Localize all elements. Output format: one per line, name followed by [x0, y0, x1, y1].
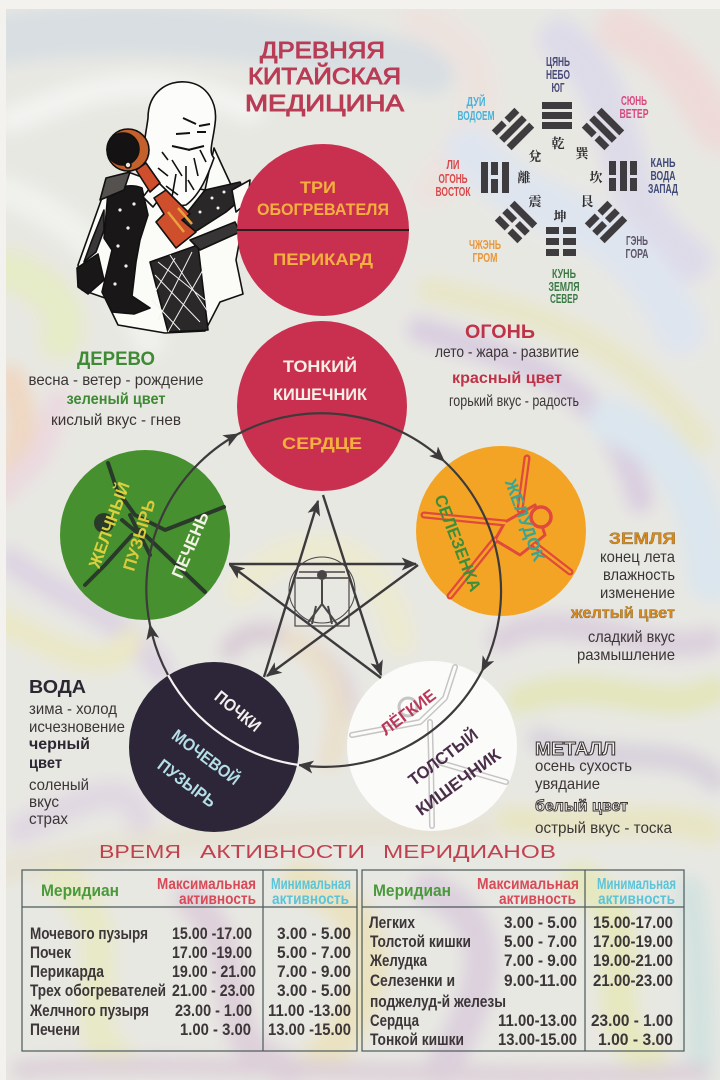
trigram: dui, lake [492, 108, 534, 150]
table header [373, 876, 676, 908]
title [245, 37, 405, 116]
robe dark panel [102, 186, 150, 314]
trigram: qian, heaven, south [542, 102, 572, 129]
trigram labels: ЗЕМЛЯ [548, 280, 580, 294]
illustration: old sage with key [77, 82, 250, 333]
table rows: 7.00 - 9.00 [277, 962, 351, 981]
text block: metal [535, 739, 672, 837]
text block: wood: зеленый цвет [66, 391, 166, 408]
title: МЕДИЦИНА [245, 90, 405, 116]
sleeve right dark band [176, 182, 246, 240]
table rows: 3.00 - 5.00 [504, 913, 577, 932]
text block: earth: сладкий вкус [588, 629, 675, 646]
hand [232, 180, 250, 212]
table rows: Желудка [369, 951, 427, 970]
circle: metal, lungs and large intestine [347, 661, 517, 831]
head [144, 82, 216, 206]
table rows: Печени [30, 1020, 80, 1039]
table rows: Трех обогревателей [30, 981, 166, 1000]
text block: water: ВОДА [29, 677, 86, 697]
text block: earth: размышление [577, 647, 675, 664]
table rows: 5.00 - 7.00 [277, 943, 351, 962]
trigram labels: ВОДА [650, 169, 676, 183]
text block: earth: влажность [603, 567, 675, 584]
heading: meridian activity times [99, 842, 556, 862]
table header: активность [179, 891, 256, 908]
trigram labels: ЛИ [446, 158, 460, 172]
table rows: 21.00-23.00 [593, 971, 673, 990]
text block: fire: горький вкус - радость [449, 393, 579, 410]
chinese trigram names: 坤 [553, 206, 567, 225]
table rows: Мочевого пузыря [30, 924, 148, 943]
table rows: Селезенки и [370, 971, 455, 990]
table rows: Почек [30, 943, 71, 962]
text block: wood: ДЕРЕВО [77, 349, 155, 370]
circle: water, kidneys and bladder: ПУЗЫРЬ [154, 755, 220, 811]
table header: Минимальная [271, 876, 351, 893]
trigram: li, fire, east [481, 162, 509, 193]
key staff [136, 163, 160, 192]
circle: triple burner and pericardium: ОБОГРЕВАТЕЛЯ [257, 200, 389, 219]
table rows: Толстой кишки [370, 932, 471, 951]
table rows: 3.00 - 5.00 [277, 981, 351, 1000]
circle: water, kidneys and bladder: ПОЧКИ [211, 687, 265, 736]
trigram labels: ЧЖЭНЬ [469, 238, 501, 252]
heading: meridian activity times: МЕРИДИАНОВ [383, 842, 556, 862]
icon: vitruvian man [289, 557, 355, 626]
trigram: xun, wind [582, 108, 624, 150]
text block: metal: белый цвет [535, 798, 628, 815]
text block: fire [435, 322, 579, 410]
chinese trigram names: 兌 [528, 146, 542, 165]
chinese trigram names: 坎 [589, 167, 603, 186]
table rows [29, 924, 351, 1039]
trigram labels [436, 55, 678, 306]
text block: water: исчезновение [29, 719, 125, 736]
text block: fire: ОГОНЬ [465, 322, 535, 343]
trigram labels: ДУЙ [466, 94, 486, 109]
table rows: 21.00 - 23.00 [172, 981, 255, 1000]
text block: water: страх [29, 811, 68, 828]
text block: metal: острый вкус - тоска [535, 820, 672, 837]
title: ДРЕВНЯЯ [260, 37, 385, 63]
text block: metal: осень сухость [535, 758, 632, 775]
beard and face marks [158, 150, 206, 197]
text block: earth: ЗЕМЛЯ [609, 529, 676, 548]
table header: Максимальная [157, 876, 256, 893]
circle: wood, gallbladder and liver: ЖЕЛЧНЫЙ [85, 480, 134, 572]
text block: fire: красный цвет [452, 370, 562, 387]
text block: water: зима - холод [29, 701, 118, 718]
trigram: gen, mountain [585, 201, 627, 243]
text block: wood: весна - ветер - рождение [28, 372, 204, 389]
chinese trigram names: 乾 [551, 133, 565, 152]
table rows: 15.00 -17.00 [172, 924, 252, 943]
trigram: zhen, thunder [495, 201, 537, 243]
trigram labels: СЮНЬ [621, 94, 647, 108]
circle: triple burner and pericardium: ТРИ [300, 178, 336, 197]
table rows: 3.00 - 5.00 [277, 924, 351, 943]
circle: wood, gallbladder and liver: ПУЗЫРЬ [120, 497, 159, 573]
table rows: 13.00-15.00 [498, 1030, 577, 1049]
trigram labels: ГЭНЬ [626, 234, 648, 248]
trigram labels: КУНЬ [552, 267, 576, 281]
bagua trigram diagram [436, 55, 678, 306]
table: right meridians [362, 870, 684, 1051]
circle: small intestine and heart [237, 321, 407, 491]
key orb [107, 129, 149, 171]
circle: metal, lungs and large intestine: КИШЕЧНИК [412, 745, 505, 819]
circle: water, kidneys and bladder: МОЧЕВОЙ [168, 726, 243, 789]
table rows: 1.00 - 3.00 [180, 1020, 251, 1039]
text block: earth [570, 529, 676, 664]
table rows: поджелуд-й железы [370, 992, 506, 1011]
table header: Меридиан [373, 881, 451, 900]
table header: активность [598, 891, 675, 908]
circle: wood, gallbladder and liver: ПЕЧЕНЬ [168, 509, 213, 581]
table rows: 9.00-11.00 [504, 971, 577, 990]
table rows: 11.00 -13.00 [268, 1001, 351, 1020]
text block: earth: изменение [600, 585, 675, 602]
trigram: kun, earth, north [546, 227, 576, 256]
circle: earth, spleen and stomach: ЖЕЛУДОК [501, 476, 548, 564]
text block: water [29, 677, 125, 828]
chinese trigram names [517, 133, 603, 225]
circle: wood, gallbladder and liver [60, 450, 230, 620]
text block: water: вкус [29, 794, 59, 811]
table header: Максимальная [477, 876, 579, 893]
table rows: 7.00 - 9.00 [504, 951, 577, 970]
trigram labels: КАНЬ [650, 156, 676, 170]
table rows: Сердца [370, 1011, 419, 1030]
table rows: Желчного пузыря [29, 1001, 149, 1020]
table rows: 19.00 - 21.00 [172, 962, 256, 981]
table header: активность [499, 891, 576, 908]
circle: water, kidneys and bladder [129, 662, 299, 832]
text block: water: черный [29, 736, 90, 753]
table rows: 23.00 - 1.00 [591, 1011, 673, 1030]
table rows: 15.00-17.00 [593, 913, 673, 932]
generation cycle ring with arrows [146, 413, 501, 767]
trigram labels: ЗАПАД [648, 182, 678, 196]
circle: earth, spleen and stomach [416, 446, 586, 616]
chinese trigram names: 離 [517, 167, 531, 186]
chinese trigram names: 震 [528, 191, 542, 210]
circle: metal, lungs and large intestine: ТОЛСТЫЙ [405, 725, 482, 790]
table rows: 17.00-19.00 [593, 932, 673, 951]
table rows: Перикарда [30, 962, 104, 981]
robe body white [78, 148, 248, 333]
table rows: Тонкой кишки [370, 1030, 464, 1049]
table rows: Легких [369, 913, 415, 932]
circle: small intestine and heart: КИШЕЧНИК [273, 385, 368, 404]
table header: Минимальная [597, 876, 676, 893]
text block: water: соленый [29, 777, 89, 794]
trigram labels: ЦЯНЬ [546, 55, 570, 69]
table header: Меридиан [41, 881, 119, 900]
diagram: five element circles [60, 144, 586, 832]
circle: small intestine and heart: ТОНКИЙ [283, 357, 357, 376]
text block: earth: желтый цвет [570, 605, 675, 622]
hand holding staff [143, 180, 166, 207]
table: left meridians [22, 870, 357, 1051]
table rows: 5.00 - 7.00 [504, 932, 577, 951]
trigram labels: ВОДОЕМ [458, 109, 494, 123]
circle: earth, spleen and stomach: СЕЛЕЗЕНКА [430, 492, 485, 594]
trigram: kan, water, west [609, 161, 637, 191]
trigram labels: ОГОНЬ [438, 172, 468, 186]
text block: water: цвет [29, 755, 62, 772]
trigram labels: СЕВЕР [550, 292, 578, 306]
text block: metal: увядание [535, 776, 600, 793]
table rows: 11.00-13.00 [498, 1011, 577, 1030]
chinese trigram names: 巽 [575, 143, 590, 162]
text block: wood [28, 349, 204, 429]
control cycle star with arrows [229, 495, 418, 678]
heading: meridian activity times: АКТИВНОСТИ [200, 842, 365, 862]
table rows: 13.00 -15.00 [268, 1020, 351, 1039]
text block: earth: конец лета [600, 549, 675, 566]
trigram labels: ГРОМ [472, 251, 498, 265]
apron lattice [150, 245, 208, 332]
chinese trigram names: 艮 [580, 191, 594, 210]
circle: small intestine and heart: СЕРДЦЕ [282, 434, 362, 453]
title: КИТАЙСКАЯ [248, 62, 401, 89]
table rows: 19.00-21.00 [593, 951, 673, 970]
circle: triple burner and pericardium: ПЕРИКАРД [273, 250, 373, 269]
table rows: 23.00 - 1.00 [175, 1001, 252, 1020]
trigram labels: НЕБО [546, 68, 570, 82]
table rows [369, 913, 673, 1049]
heading: meridian activity times: ВРЕМЯ [99, 842, 181, 862]
table rows: 17.00 -19.00 [172, 943, 252, 962]
trigram labels: ЮГ [552, 81, 564, 95]
text block: metal: МЕТАЛЛ [535, 739, 616, 759]
text block: fire: лето - жара - развитие [435, 344, 579, 361]
circle: triple burner and pericardium [237, 144, 409, 316]
table header: активность [272, 891, 349, 908]
trigram labels: ВОСТОК [436, 185, 471, 199]
circle: metal, lungs and large intestine: ЛЁГКИЕ [377, 686, 440, 739]
table rows: 1.00 - 3.00 [598, 1030, 673, 1049]
text block: wood: кислый вкус - гнев [51, 412, 181, 429]
trigram labels: ВЕТЕР [620, 107, 648, 121]
table header [41, 876, 351, 908]
trigram labels: ГОРА [626, 247, 648, 261]
